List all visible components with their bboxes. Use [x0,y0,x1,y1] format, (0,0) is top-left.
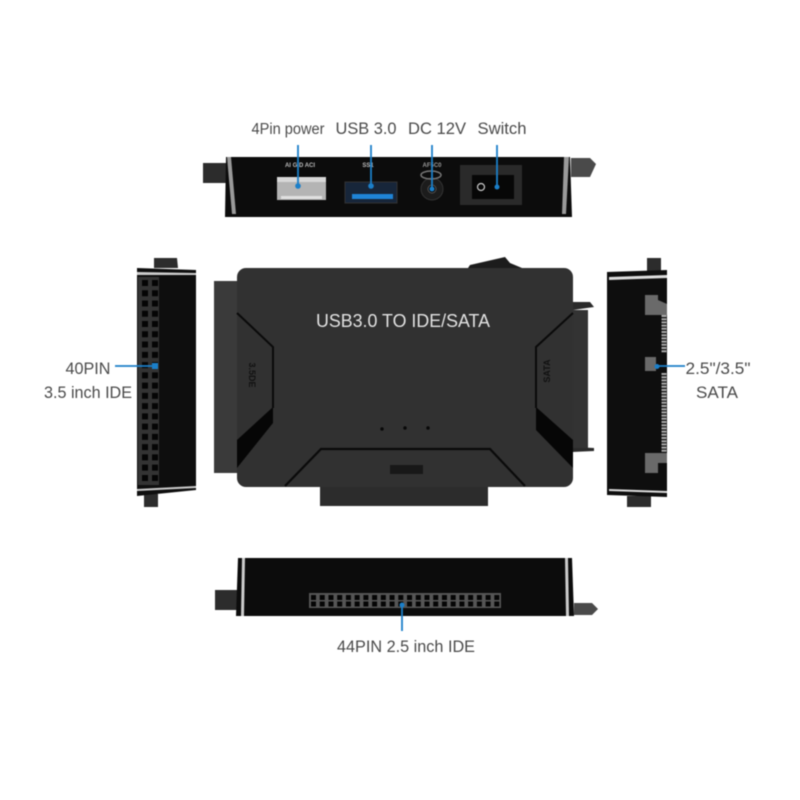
label: 2.5"/3.5" SATA: 2.5"/3.5" [686,360,751,378]
44-pin strip [309,593,501,608]
product title: USB3.0 TO IDE/SATA [316,311,490,331]
SATA contact combs [662,315,666,452]
bottom chevron line [285,449,525,486]
label: 2.5"/3.5" SATA: SATA [696,384,738,402]
body [236,558,574,616]
USB 3.0 port [345,182,397,203]
label: 40PIN 3.5 inch IDE: 40PIN [66,360,110,378]
left port name: 3.5DE [247,362,257,388]
left connector housing [214,281,238,473]
body [607,270,667,497]
label: USB 3.0 [336,120,396,189]
bottom port name [390,465,423,474]
right silver edge [562,157,569,214]
bottom connector housing [320,486,488,506]
top tab [647,258,661,271]
right connector inner [573,310,588,448]
panel: bottom view with 44-pin connector [215,558,598,616]
label: 4Pin power: 4Pin power [252,121,324,138]
right chevron line [536,313,573,408]
right silver edge [565,558,569,616]
top tab [154,258,178,268]
top silver edge [609,275,667,280]
left tab [203,163,226,183]
label: 2.5"/3.5" SATA [654,360,751,402]
main body [237,268,573,487]
DC legend mark: AF5C0 [422,163,442,169]
label: USB 3.0: USB 3.0 [336,120,396,138]
label: DC 12V [408,120,466,192]
LED indicators [380,426,430,431]
rocker switch [460,165,522,205]
label: DC 12V: DC 12V [408,120,466,138]
bottom tab [144,494,158,507]
label: Switch [478,120,526,190]
body [137,268,196,496]
left tab [215,590,238,610]
panel: main adapter top face [214,257,594,506]
left black wedge [237,407,273,468]
top silver edge [137,272,196,275]
4-pin power port [277,177,326,200]
right tab [574,603,598,615]
label: 40PIN 3.5 inch IDE [44,360,158,402]
right black wedge [536,407,573,468]
label: 4Pin power [252,121,324,189]
left chevron line [237,313,273,408]
bottom silver edge [137,486,196,491]
left silver edge [227,157,236,214]
right tab [571,158,596,177]
right connector housing [572,302,594,452]
label: Switch: Switch [478,120,526,138]
bottom silver edge [609,489,667,493]
device body [225,157,572,217]
port legend marks: AI G D ACI [285,163,315,169]
label: 44PIN 2.5 inch IDE [337,602,475,656]
SATA bottom latch [645,453,667,473]
right port name: SATA [542,359,552,383]
power switch silhouette [468,257,522,268]
label: 40PIN 3.5 inch IDE: 3.5 inch IDE [44,384,132,402]
USB legend mark: SS1 [362,163,374,169]
label: 44PIN 2.5 inch IDE: 44PIN 2.5 inch IDE [337,638,475,656]
left silver edge [241,558,245,616]
SATA top latch [645,295,667,315]
bottom tab [627,496,651,507]
panel: top view with ports [203,157,596,217]
40-pin strip [138,277,159,485]
panel: right view with SATA connector [607,258,667,507]
panel: left view with 40-pin connector [137,258,196,507]
DC jack [421,171,443,200]
SATA middle latch [645,357,656,371]
